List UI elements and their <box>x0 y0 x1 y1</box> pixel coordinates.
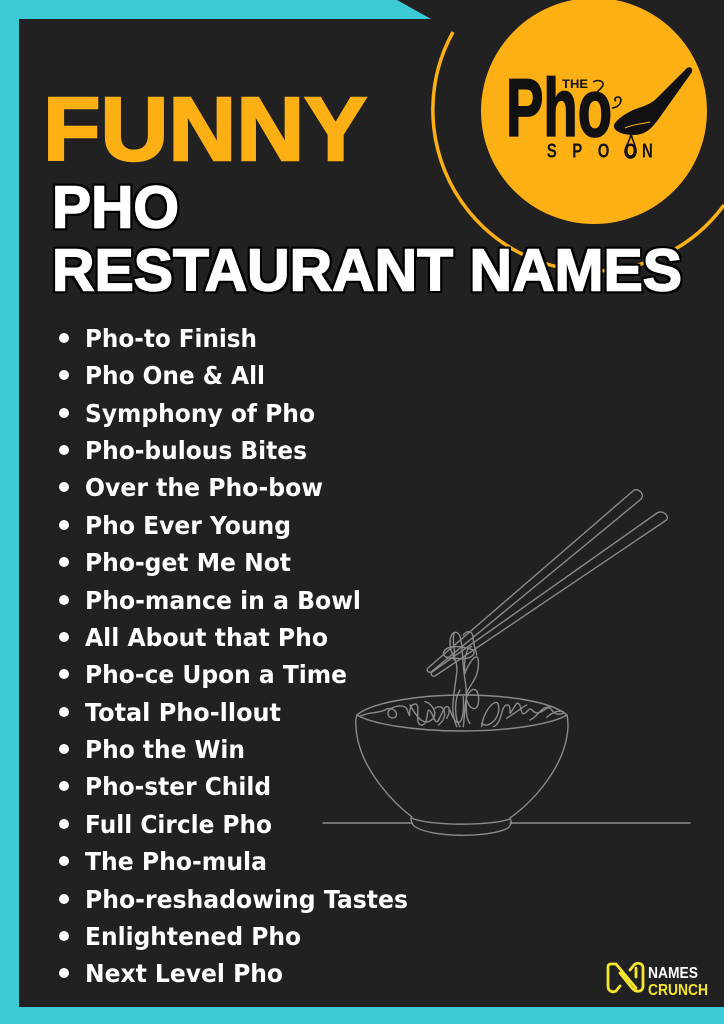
list of restaurant names: Pho the Win <box>85 735 245 764</box>
logo: The Pho Spoon: Pho <box>506 63 612 154</box>
title: restaurant names: RESTAURANT NAMES <box>52 238 682 304</box>
list of restaurant names: Pho-to Finish <box>85 324 257 353</box>
list of restaurant names: Pho-bulous Bites <box>85 436 307 465</box>
list of restaurant names: Pho One & All <box>85 361 265 390</box>
list of restaurant names: Next Level Pho <box>85 959 283 988</box>
decorative ring around logo <box>433 32 724 271</box>
list of restaurant names <box>59 324 408 988</box>
title: pho: PHO <box>52 174 179 240</box>
list of restaurant names: Pho-mance in a Bowl <box>85 586 361 615</box>
logo: Names Crunch: NAMES <box>648 965 698 982</box>
logo: The Pho Spoon: THE <box>562 77 588 91</box>
list of restaurant names: The Pho-mula <box>85 847 267 876</box>
list of restaurant names: Pho-reshadowing Tastes <box>85 885 408 914</box>
list of restaurant names: Pho-ster Child <box>85 772 271 801</box>
list of restaurant names: Pho Ever Young <box>85 511 291 540</box>
list of restaurant names: Over the Pho-bow <box>85 473 323 502</box>
list of restaurant names: Pho-ce Upon a Time <box>85 660 347 689</box>
list of restaurant names: Symphony of Pho <box>85 399 315 428</box>
logo: The Pho Spoon <box>481 0 707 224</box>
list of restaurant names: Total Pho-llout <box>85 698 281 727</box>
list of restaurant names: All About that Pho <box>85 623 328 652</box>
illustration: noodle bowl and chopsticks <box>323 490 690 835</box>
logo: Names Crunch: CRUNCH <box>648 982 708 999</box>
list of restaurant names: Full Circle Pho <box>85 810 272 839</box>
bullets <box>59 333 69 978</box>
logo: Names Crunch <box>608 963 708 999</box>
list of restaurant names: Pho-get Me Not <box>85 548 291 577</box>
list of restaurant names: Enlightened Pho <box>85 922 301 951</box>
title: funny: FUNNY <box>43 80 367 180</box>
logo: The Pho Spoon: SPOON <box>547 139 653 162</box>
